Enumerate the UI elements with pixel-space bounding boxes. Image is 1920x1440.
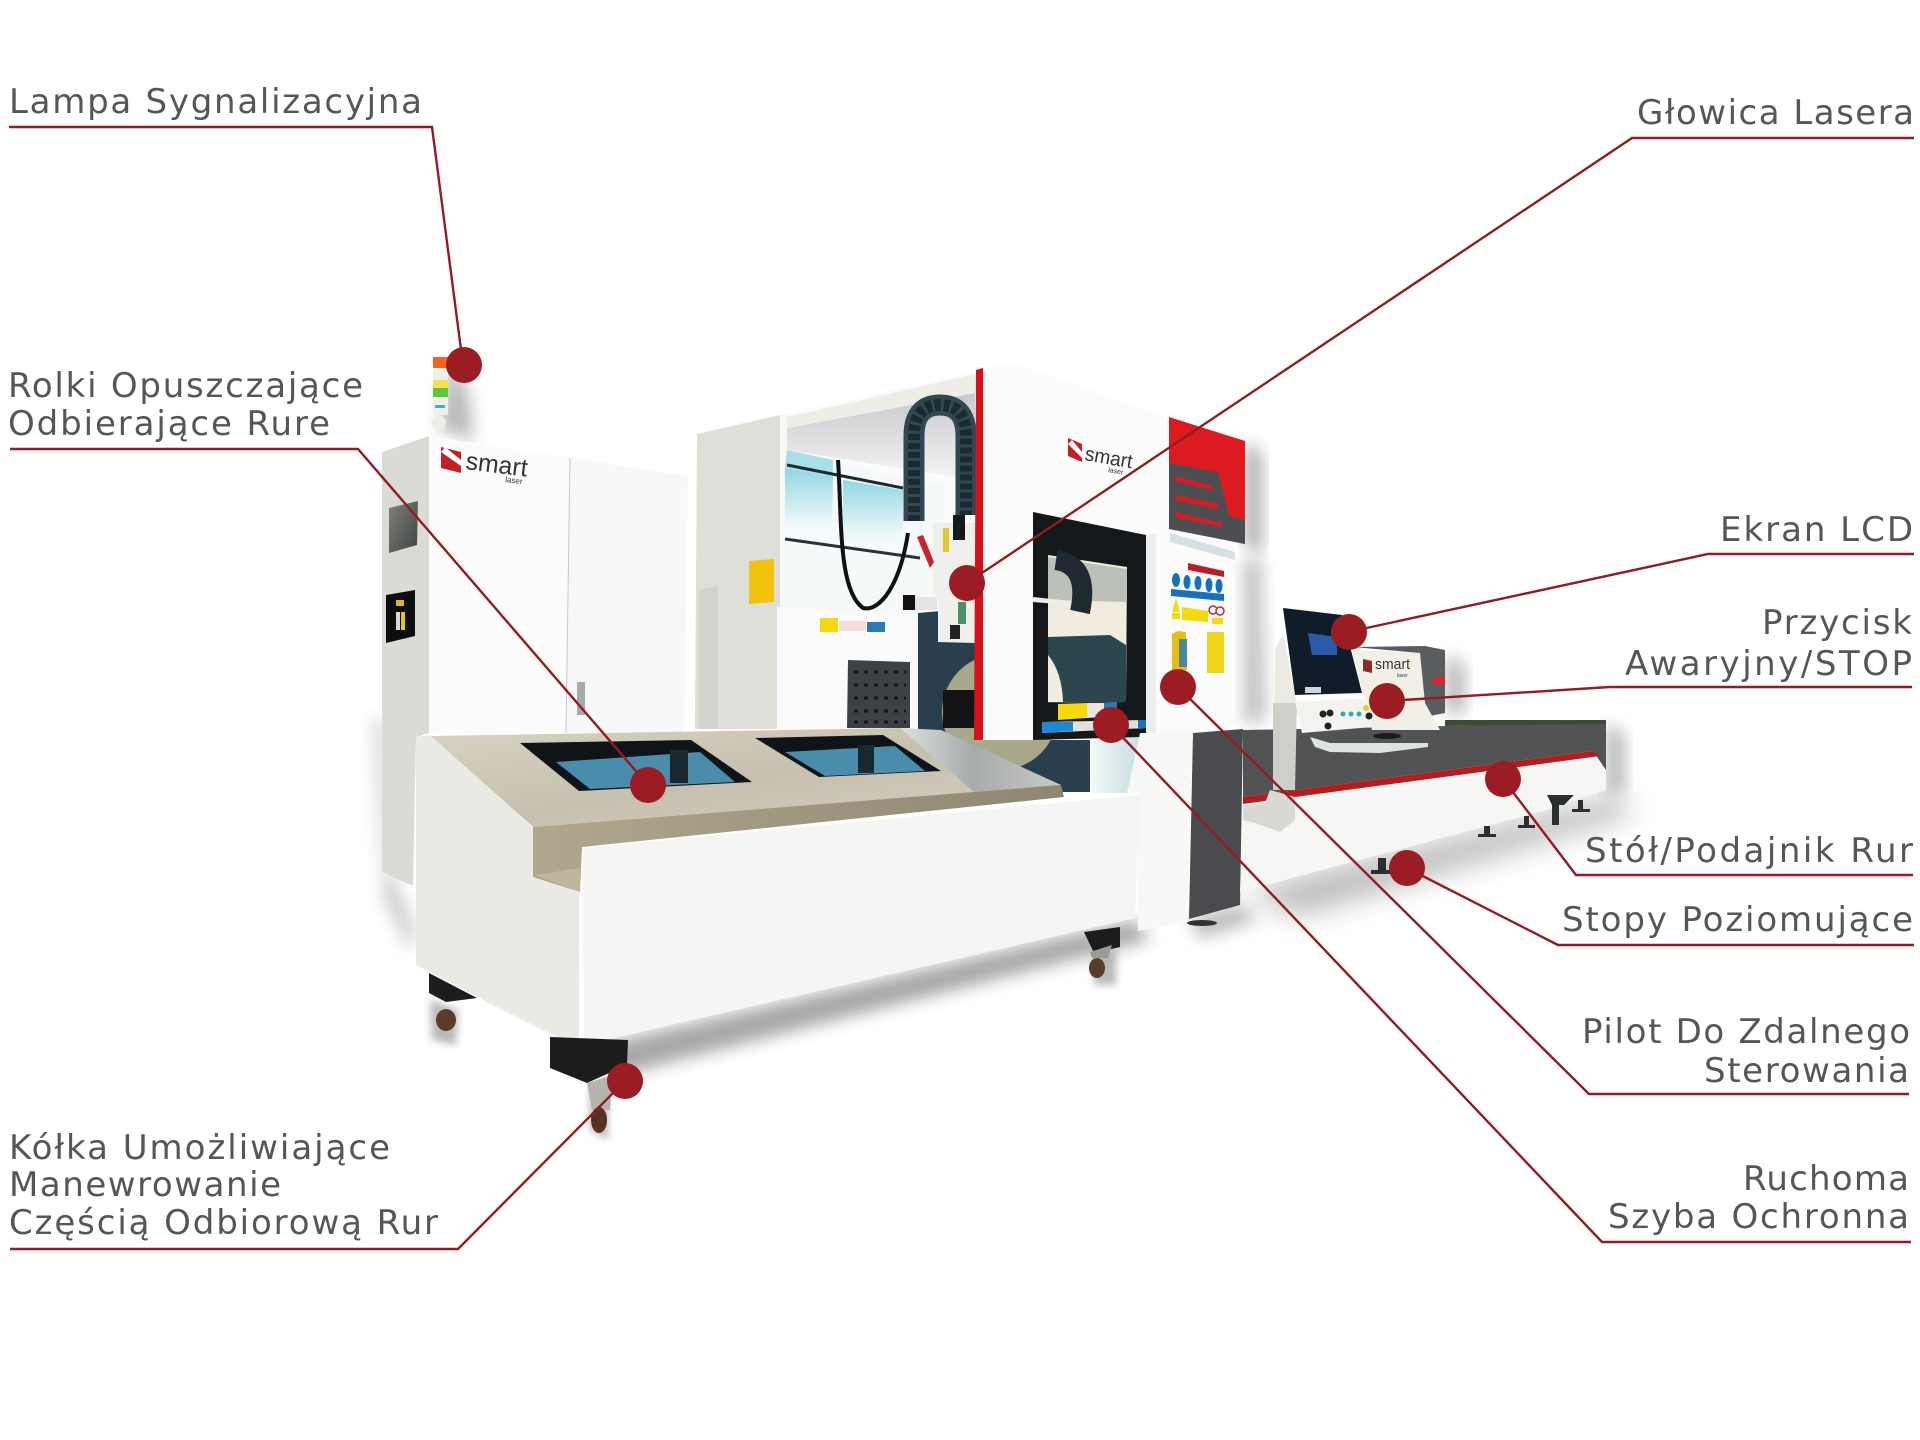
white table base [1240, 756, 1606, 892]
front caster [550, 1037, 628, 1133]
button panel [1295, 698, 1372, 733]
tray side panel [416, 735, 579, 1048]
leader line: Stół/Podajnik Rur [1503, 779, 1913, 875]
label: Ruchoma Szyba Ochronna: Ruchoma [1743, 1159, 1909, 1199]
marker dot: levelling feet [1389, 850, 1425, 886]
leader line: Lampa Sygnalizacyjna [9, 127, 463, 365]
keyboard tray [1310, 737, 1428, 753]
console logo: laser [1397, 673, 1408, 679]
leader line: Ruchoma Szyba Ochronna [1111, 725, 1911, 1242]
area under gantry [1091, 729, 1243, 931]
label: Ruchoma Szyba Ochronna: Szyba Ochronna [1608, 1197, 1909, 1237]
console arm upper [1275, 633, 1297, 705]
bronze front edge [533, 785, 1064, 892]
cable chain [914, 405, 966, 521]
label: Rolki Opuszczające Odbierające Rure: Odbierające Rure [8, 404, 330, 444]
warning labels strip [820, 618, 885, 632]
large white front panel [582, 795, 1140, 1045]
label: Głowica Lasera: Głowica Lasera [1637, 93, 1914, 133]
protective glass with interior view [1033, 555, 1127, 703]
thin top strip [1445, 720, 1606, 726]
label: Pilot Do Zdalnego Sterowania [1582, 1012, 1910, 1091]
yellow warning label [749, 559, 774, 604]
LCD monitor [1283, 608, 1362, 695]
red accent stripe [1243, 751, 1600, 804]
pale reflective panel [1091, 737, 1143, 793]
cabinet side panel [382, 436, 429, 886]
console arm column [1273, 703, 1297, 790]
tube chuck disc [942, 654, 1058, 770]
right caster [1084, 927, 1120, 978]
marker dot: remote control [1160, 669, 1196, 705]
rear windows [785, 450, 945, 618]
label: Pilot Do Zdalnego Sterowania: Sterowania [1704, 1051, 1909, 1091]
switch box [386, 590, 415, 643]
logo: smart laser [1068, 438, 1135, 477]
label: Przycisk Awaryjny/STOP: Przycisk [1762, 603, 1912, 643]
perforated panel [847, 660, 910, 728]
leader line: Przycisk Awaryjny/STOP [1387, 687, 1912, 701]
gantry rear column and machine interior [695, 372, 1090, 792]
logo: smart laser: laser [1108, 467, 1124, 477]
vent plate [389, 501, 418, 553]
gantry shell [983, 362, 1235, 740]
blue guide roller [1042, 720, 1146, 733]
dark top band [1243, 723, 1606, 797]
exhaust elbow [1243, 790, 1295, 832]
door handle [577, 682, 585, 715]
logo: smart laser: laser [505, 475, 523, 486]
marker dot: protective glass [1093, 707, 1129, 743]
label: Przycisk Awaryjny/STOP [1625, 603, 1912, 684]
yellow remote pendant [1172, 631, 1187, 670]
marker dot: LCD screen [1331, 614, 1367, 650]
left caster [429, 973, 477, 1031]
label: Stół/Podajnik Rur: Stół/Podajnik Rur [1585, 831, 1913, 871]
safety signs panel [1171, 563, 1224, 624]
lower white enclosure [777, 607, 918, 729]
white pedestal [1127, 733, 1193, 931]
label: Kółka Umożliwiające Manewrowanie Częścią Odbiorową Rur: Manewrowanie [9, 1165, 281, 1205]
console cabinet [1352, 646, 1445, 730]
strip beside window frame [1146, 533, 1156, 737]
yellow instruction sheet [1207, 632, 1224, 673]
label: Kółka Umożliwiające Manewrowanie Częścią Odbiorową Rur [9, 1128, 438, 1243]
leader line: Głowica Lasera [967, 138, 1914, 583]
casters [429, 927, 1120, 1133]
label: Ekran LCD: Ekran LCD [1720, 510, 1913, 550]
logo: smart laser: smart [1083, 443, 1135, 473]
opening two with rollers [755, 735, 941, 777]
red cover panel [1169, 417, 1245, 544]
tube unloading tray [416, 728, 1140, 1048]
console logo: smart [1375, 656, 1411, 673]
leader line: Stopy Poziomujące [1407, 868, 1914, 945]
label: Lampa Sygnalizacyjna: Lampa Sygnalizacyjna [9, 82, 422, 122]
logo: smart laser: smart [464, 447, 529, 483]
black cable loop [838, 460, 908, 608]
dark machine bay [918, 608, 1090, 792]
console logo [1363, 656, 1411, 679]
marker dot: feed table [1485, 761, 1521, 797]
main white gantry housing [974, 362, 1245, 740]
label: Stopy Poziomujące: Stopy Poziomujące [1562, 900, 1913, 940]
grey vent plate with red slots [1169, 463, 1245, 544]
operator console [1243, 608, 1445, 832]
black window frame [1033, 512, 1146, 740]
machine: tube laser cutter [374, 357, 1630, 1140]
label: Pilot Do Zdalnego Sterowania: Pilot Do Zdalnego [1582, 1012, 1910, 1052]
label: Kółka Umożliwiające Manewrowanie Częścią Odbiorową Rur: Kółka Umożliwiające [9, 1128, 390, 1168]
label: Rolki Opuszczające Odbierające Rure: Rolki Opuszczające [8, 366, 363, 406]
label: Kółka Umożliwiające Manewrowanie Częścią Odbiorową Rur: Częścią Odbiorową Rur [9, 1203, 438, 1243]
marker dot: signal lamp [446, 347, 482, 383]
stainless top plate [431, 728, 1061, 827]
label: Rolki Opuszczające Odbierające Rure [8, 366, 363, 444]
label: Przycisk Awaryjny/STOP: Awaryjny/STOP [1625, 644, 1912, 684]
label: Ruchoma Szyba Ochronna [1608, 1159, 1909, 1237]
marker dot: laser head [949, 565, 985, 601]
levelling feet [1371, 795, 1590, 874]
tray shelf gap [535, 868, 580, 892]
marker dot: casters [607, 1063, 643, 1099]
leader line: Kółka [10, 1081, 625, 1249]
leader line: Rolki Opuszczające [10, 449, 648, 785]
pillar foot [1187, 920, 1217, 926]
red edge strip [974, 368, 983, 740]
marker dot: emergency stop [1369, 683, 1405, 719]
logo: smart laser [441, 447, 529, 486]
signal lamp tower [432, 357, 448, 430]
mouse [1373, 733, 1401, 739]
grey column [695, 415, 780, 729]
small warning labels in frame [1058, 702, 1117, 720]
black chuck box [943, 690, 977, 728]
dark grey pillar [1189, 729, 1243, 919]
marker dot: rollers [630, 767, 666, 803]
soft shadows under the machine [374, 360, 1630, 1140]
inclined steel plate [900, 728, 1061, 792]
leader line: Pilot Do Zdalnego Sterowania [1178, 687, 1909, 1094]
shading below red panel [1170, 533, 1235, 560]
laser head assembly [903, 515, 975, 643]
top beam [787, 374, 976, 428]
feed table [1240, 720, 1606, 892]
leader line: Ekran LCD [1348, 554, 1914, 632]
opening one with rollers [520, 740, 752, 791]
cabinet front doors [429, 436, 688, 733]
interior backdrop [780, 372, 976, 740]
left electrical cabinet [382, 436, 688, 886]
